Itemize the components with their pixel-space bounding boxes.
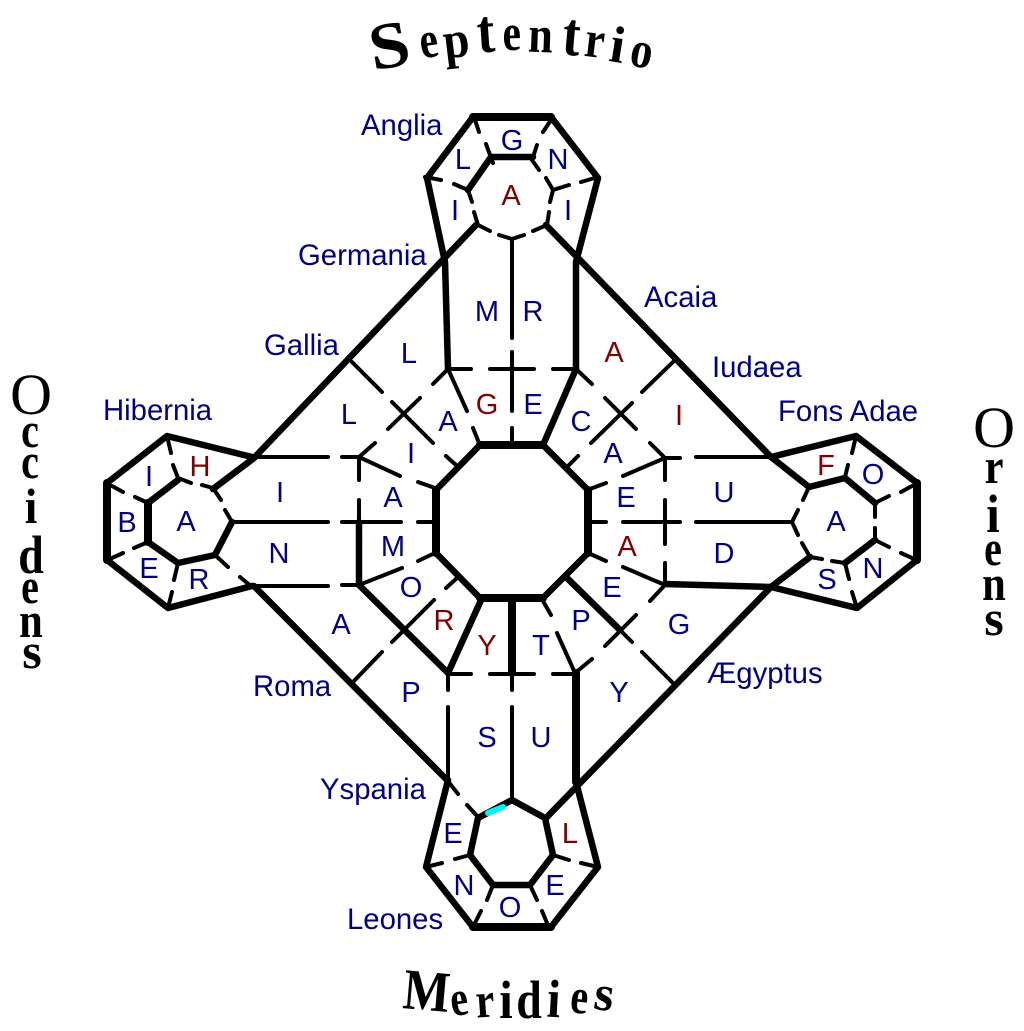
heading: Septentrio: r (582, 11, 608, 70)
cell letters: I (276, 477, 284, 509)
heading: Septentrio: S (363, 6, 416, 85)
heading: Oriens: n (982, 557, 1006, 612)
region labels: Leones (347, 903, 443, 936)
heading: Occidens: O (10, 362, 52, 427)
cell letters: E (139, 553, 159, 585)
heading: Oriens: e (984, 521, 1002, 576)
heading: Oriens: i (986, 485, 1000, 545)
cell letters: O (499, 892, 521, 924)
cell letters: S (477, 722, 497, 754)
region labels: Acaia (644, 281, 718, 314)
heading: Occidens: i (25, 480, 37, 535)
cell letters: F (817, 450, 835, 482)
cell letters: N (454, 870, 474, 902)
heading: Septentrio: t (560, 1, 583, 70)
cell letters: E (443, 818, 463, 850)
heading: Occidens (10, 362, 52, 679)
region labels: Fons Adae (778, 395, 918, 428)
cell letters: N (548, 144, 568, 176)
cell letters: E (616, 482, 636, 514)
heading: Septentrio: e (502, 5, 521, 62)
cell letters: L (341, 399, 357, 431)
heading: Occidens: n (19, 594, 43, 649)
heading: Occidens: e (21, 559, 39, 614)
cell letters: L (562, 818, 578, 850)
cell letters: R (189, 564, 209, 596)
cell letters: I (451, 195, 459, 227)
heading: Occidens: c (21, 403, 39, 458)
cell letters: P (571, 605, 591, 637)
heading: Oriens: r (985, 440, 1003, 495)
cell letters: E (523, 389, 543, 421)
cell letters: T (532, 630, 550, 662)
highlighted cyan wall segment (488, 807, 503, 813)
cell letters: A (603, 438, 623, 470)
heading: Occidens: c (21, 434, 39, 489)
south arm: Leones and Yspania (426, 598, 598, 927)
cell letters: I (564, 195, 572, 227)
cell letters: C (571, 406, 591, 438)
cell letters: A (501, 180, 521, 212)
heading: Meridies: s (591, 964, 619, 1022)
cell letters: Y (609, 677, 629, 709)
heading: Oriens (973, 395, 1015, 646)
cell letters: A (604, 337, 624, 369)
cell letters: I (675, 400, 683, 432)
cell letters: E (545, 870, 565, 902)
heading: Meridies: d (516, 970, 542, 1030)
heading: Occidens: d (18, 525, 44, 585)
heading: Septentrio: o (626, 20, 658, 81)
heading: Meridies: M (401, 956, 453, 1025)
heading: Septentrio: p (439, 10, 472, 70)
cell letters: A (438, 406, 458, 438)
cell letters: U (531, 722, 551, 754)
cell letters: R (434, 605, 454, 637)
cell letters: B (117, 507, 137, 539)
heading: Septentrio: i (606, 16, 629, 75)
cell letters: A (176, 506, 196, 538)
cell letters: L (455, 144, 471, 176)
region labels: Gallia (264, 329, 340, 362)
cell letters: G (476, 389, 498, 421)
cell letters: M (475, 296, 499, 328)
region labels: Anglia (361, 109, 443, 142)
cell letters: O (862, 459, 884, 491)
upper crossing walls (352, 352, 673, 445)
cell letters: U (714, 477, 734, 509)
region labels: Germania (298, 239, 427, 272)
heading: Meridies (401, 956, 619, 1031)
heading: Meridies: r (474, 973, 496, 1029)
cell letters: G (668, 609, 690, 641)
cell letters: P (401, 677, 421, 709)
region labels: Ægyptus (707, 657, 823, 690)
heading: Occidens: s (22, 623, 42, 679)
heading: Meridies: e (446, 970, 471, 1027)
cell letters: O (400, 572, 422, 604)
heading: Septentrio (363, 0, 658, 85)
right crossing walls (567, 443, 680, 683)
outer diamond walls (213, 225, 810, 818)
region labels: Yspania (320, 773, 427, 806)
cell letters: A (826, 506, 846, 538)
cell letters: M (381, 531, 405, 563)
central octagon (418, 428, 606, 615)
cell letters: Y (477, 630, 497, 662)
left crossing walls (342, 443, 482, 683)
heading: Septentrio: n (527, 6, 554, 64)
cell letters: E (602, 572, 622, 604)
cell letters: R (523, 296, 543, 328)
cell letters: D (714, 538, 734, 570)
cell letters: I (145, 461, 153, 493)
heading: Septentrio: e (415, 11, 442, 70)
cell letters: G (501, 125, 523, 157)
east arm: Fons Adae (665, 436, 917, 608)
cell letters: A (331, 609, 351, 641)
region labels: Hibernia (103, 394, 213, 427)
west arm: Hibernia (107, 436, 328, 608)
cell letters: H (190, 451, 210, 483)
heading: Meridies: e (568, 968, 591, 1025)
cell letters (117, 125, 884, 924)
cell letters: A (383, 482, 403, 514)
region labels: Iudaea (712, 351, 802, 384)
heading: Meridies: i (499, 971, 513, 1031)
cell letters: N (863, 553, 883, 585)
heading: Oriens: O (973, 395, 1015, 460)
cell letters: L (401, 338, 417, 370)
cell letters: N (269, 538, 289, 570)
heading: Meridies: i (546, 969, 562, 1030)
cell letters: I (407, 438, 415, 470)
region labels: Roma (253, 670, 332, 703)
north arm: Anglia (425, 117, 598, 369)
cell letters: S (817, 564, 837, 596)
region labels (103, 109, 918, 936)
cell letters: A (617, 531, 637, 563)
heading: Oriens: s (984, 590, 1004, 646)
